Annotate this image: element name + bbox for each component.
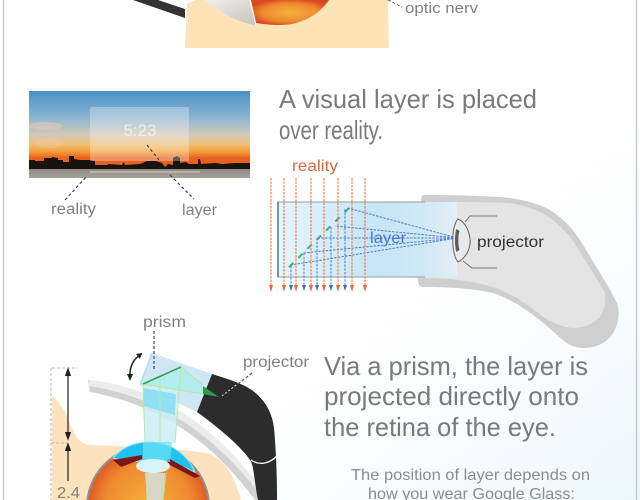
label: projector: projector [477,234,544,251]
heading: via a prism: Via a prism, the layer is [324,351,588,381]
glass tube [278,202,457,277]
label: layer blue: layer [370,230,407,247]
beam through cornea [143,442,172,462]
projector lens [453,216,497,268]
illustration: eye cross-section, top [133,0,402,48]
heading: visual layer: over reality. [279,115,383,145]
pointer: prism [153,331,155,369]
eye [87,442,209,500]
photo: skyline with layer [28,91,250,178]
label: layer: layer [182,202,217,219]
cornea [113,442,195,472]
arm inner [420,202,605,328]
beam through eye [145,473,165,500]
diagram: glass side view [269,178,619,348]
face outline [52,395,241,500]
rotation arrowheads [127,353,142,381]
blue arrowheads [289,285,347,291]
height dimension guide [51,368,78,500]
prism [140,353,212,412]
light beam [143,367,181,443]
projector beam [203,386,219,397]
heading: via a prism [324,351,588,442]
reality rays [271,178,365,286]
label: prism: prism [143,314,186,331]
heading: via a prism: projected directly onto [324,381,579,411]
label: reality: reality [51,201,96,218]
heading: visual layer [279,84,537,145]
lens [136,459,170,473]
layer rays [291,208,457,286]
label: projector top: projector [243,354,309,371]
diagram: prism and eye [51,353,277,500]
green reflectors [289,208,349,267]
heading: visual layer: A visual layer is placed [279,84,537,114]
text block: layer position [351,467,590,500]
heading: via a prism: the retina of the eye. [324,412,556,442]
iris [113,455,200,478]
label: reality orange: reality [292,158,338,175]
dark projector arm [197,374,277,500]
label: optic nerv: optic nerv [405,0,479,17]
layer overlay: 5:23 [123,121,157,140]
height arrows [66,369,70,481]
visor [88,380,269,500]
layer overlay [90,107,189,161]
orange arrowheads [269,285,367,292]
pointer lines: photo labels [65,145,194,200]
rotation arrow [130,354,142,378]
glass arm [418,195,619,348]
prism mirror [143,367,181,384]
pointer: projector [238,373,252,384]
text block: layer position: The position of layer depends on [351,467,590,484]
